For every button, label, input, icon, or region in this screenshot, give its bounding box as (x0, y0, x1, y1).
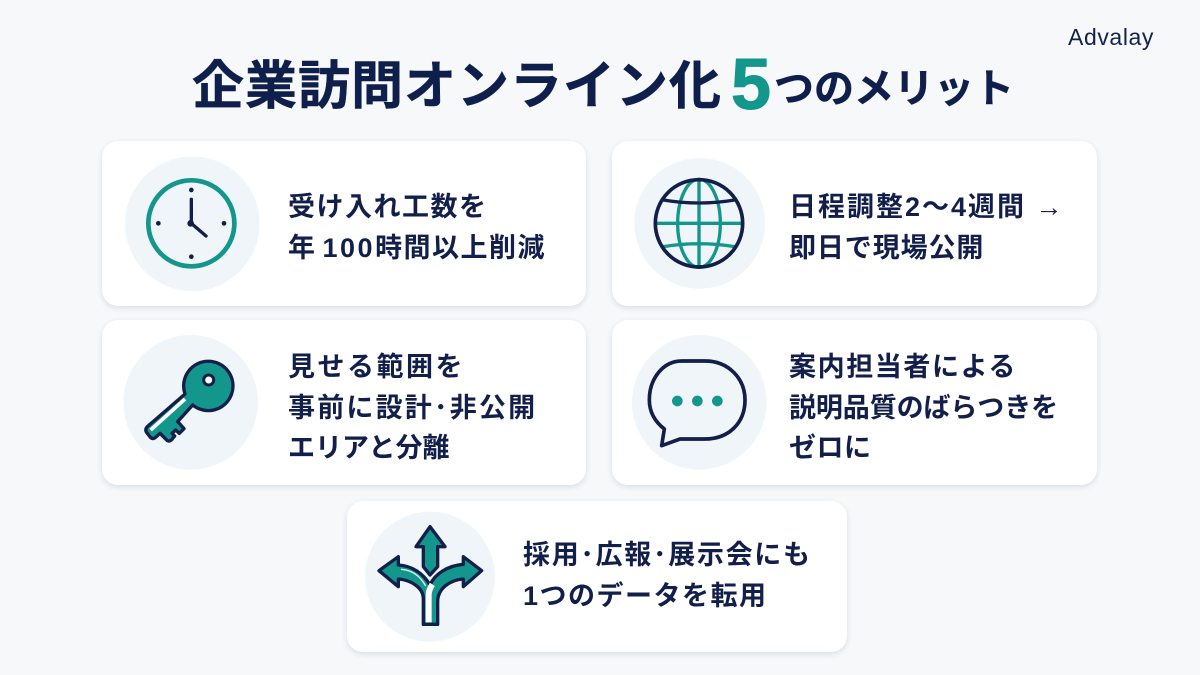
text: workload: 受け入れ工数を (288, 192, 488, 222)
text: reuse: 1つのデータを転用 (523, 581, 768, 611)
text: quality: 案内担当者による (789, 352, 1017, 382)
text: workload: 年100時間以上削減 (288, 233, 546, 263)
icon: key (124, 335, 258, 470)
panel: visible range (102, 320, 586, 485)
text: workload (288, 192, 546, 263)
title: 5 (731, 45, 771, 125)
icon: three-way arrows (365, 512, 495, 642)
icon: clock (125, 156, 260, 291)
panel: reuse (347, 501, 847, 652)
panel: quality (612, 320, 1097, 485)
text: visible range: 見せる範囲を (288, 352, 465, 382)
text: reuse: 採用･広報･展示会にも (523, 540, 812, 570)
title: つのメリット (774, 67, 1014, 111)
logo: Advalay: Advalay (1068, 24, 1154, 50)
panel: schedule (612, 141, 1097, 306)
text: visible range: エリアと分離 (288, 433, 449, 463)
text: quality: ゼロに (789, 433, 872, 463)
icon: globe (634, 158, 765, 288)
text: reuse (523, 540, 812, 611)
text: visible range: 事前に設計･非公開 (288, 392, 537, 422)
title (192, 45, 1014, 125)
text: visible range (288, 352, 537, 463)
text: quality: 説明品質のばらつきを (789, 392, 1058, 422)
text: quality (789, 352, 1058, 463)
text: schedule: 日程調整2〜4週間 → (789, 192, 1065, 222)
text: schedule: 即日で現場公開 (789, 233, 984, 263)
icon: speech bubble (632, 335, 766, 470)
text: schedule (789, 192, 1065, 263)
panel: workload reduction (102, 141, 586, 306)
title: 企業訪問オンライン化 (192, 58, 722, 116)
